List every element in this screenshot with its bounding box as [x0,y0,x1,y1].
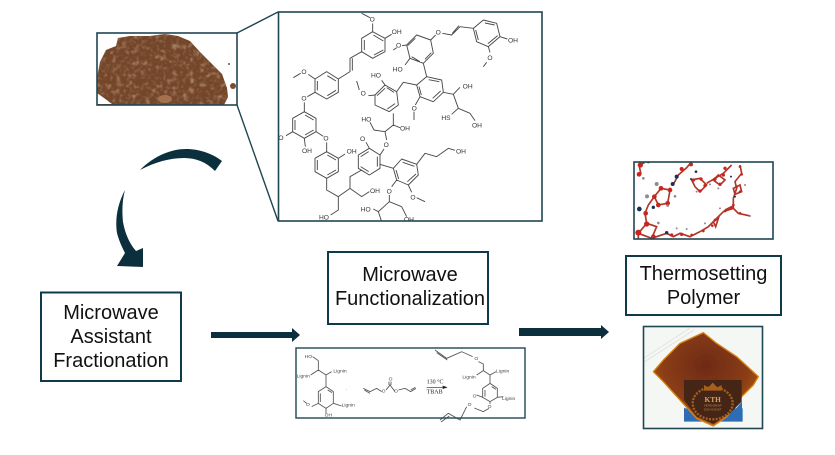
arrow: fractionation to functionalization [211,328,300,342]
box: Microwave Functionalization [328,252,488,324]
panel: lignin molecular structure: O [487,55,493,62]
panel: lignin molecular structure: O [301,69,307,76]
panel: functionalization reaction scheme: O [306,402,310,408]
panel: lignin molecular structure: OH [302,148,312,155]
panel: functionalization reaction scheme: O [473,393,477,399]
panel: lignin molecular structure: HO [319,214,329,221]
box: Thermosetting Polymer: Polymer [667,287,741,309]
panel: functionalization reaction scheme: Lignin [496,368,510,374]
panel: lignin molecular structure [278,12,542,224]
panel: lignin molecular structure: O [384,142,389,149]
zoom lines from powder to structure [237,12,278,221]
arrow: functionalization to polymer [519,325,609,339]
panel: functionalization reaction scheme: O [468,402,472,408]
panel: functionalization reaction scheme: OH [325,413,333,419]
panel: functionalization reaction scheme: Lignin [502,396,516,402]
panel: lignin molecular structure: O [361,91,366,98]
panel: lignin molecular structure: O [387,188,392,195]
panel: lignin molecular structure: OH [347,148,357,155]
panel: functionalization reaction scheme: Lignin [297,374,310,380]
panel: functionalization reaction scheme: O [394,389,398,395]
photo: thermoset sample with KTH logo [644,326,762,428]
panel: lignin molecular structure: OH [508,38,518,45]
panel: functionalization reaction scheme: Lignin [342,403,355,409]
panel: lignin molecular structure: O [436,29,441,36]
panel: lignin molecular structure: O [410,194,416,201]
box: Microwave Assistant Fractionation: Assistant [70,326,152,348]
photo: thermoset sample with KTH logo: VETENSKAP [704,404,722,408]
panel: lignin molecular structure: OH [392,29,402,36]
panel: lignin molecular structure: OH [456,148,466,155]
box: Microwave Assistant Fractionation: Microwave [63,302,159,324]
panel: lignin molecular structure: O [278,135,284,142]
box: Thermosetting Polymer: Thermosetting [640,263,767,285]
panel: functionalization reaction scheme: . [346,385,347,391]
panel: functionalization reaction scheme [296,348,525,422]
panel: lignin molecular structure: HO [361,207,371,214]
photo: thermoset sample with KTH logo: OCH KONST [704,407,722,411]
box: Microwave Functionalization: Functionalization [335,288,485,310]
box: Microwave Functionalization: Microwave [362,264,458,286]
panel: lignin molecular structure: OH [463,83,473,90]
panel: functionalization reaction scheme: HO [305,354,312,360]
panel: polymer network molecular model [634,160,773,242]
panel: lignin molecular structure: O [360,136,365,143]
panel: functionalization reaction scheme: Lignin [462,374,476,380]
panel: lignin molecular structure: HO [393,66,403,73]
panel: functionalization reaction scheme: 130 °C [427,378,444,385]
panel: lignin molecular structure: HO [371,73,381,80]
box: Microwave Assistant Fractionation: Fractionation [53,350,169,372]
panel: functionalization reaction scheme: O [488,404,492,410]
panel: lignin molecular structure: OH [472,122,482,129]
curved arrow: down arc with head [116,190,143,267]
panel: lignin molecular structure: O [301,95,307,102]
panel: lignin molecular structure: HO [361,116,371,123]
panel: lignin molecular structure: OH [370,188,380,195]
photo: thermoset sample with KTH logo: KTH [705,395,721,404]
panel: functionalization reaction scheme: Lignin [333,369,347,375]
photo: lignin powder [97,33,237,105]
panel: functionalization reaction scheme: O [389,377,393,383]
box: Thermosetting Polymer [626,256,781,315]
panel: functionalization reaction scheme: O [382,389,386,395]
panel: lignin molecular structure: O [323,135,329,142]
box: Microwave Assistant Fractionation [41,292,181,381]
panel: lignin molecular structure: O [396,43,401,50]
panel: lignin molecular structure: HS [441,115,451,122]
panel: functionalization reaction scheme: TBAB [427,390,443,396]
panel: functionalization reaction scheme: O [474,356,478,362]
panel: lignin molecular structure: OH [404,217,414,224]
panel: lignin molecular structure: O [412,105,417,112]
panel: lignin molecular structure: OH [400,126,410,133]
curved arrow: top arc [140,149,222,171]
panel: lignin molecular structure: O [370,17,375,24]
